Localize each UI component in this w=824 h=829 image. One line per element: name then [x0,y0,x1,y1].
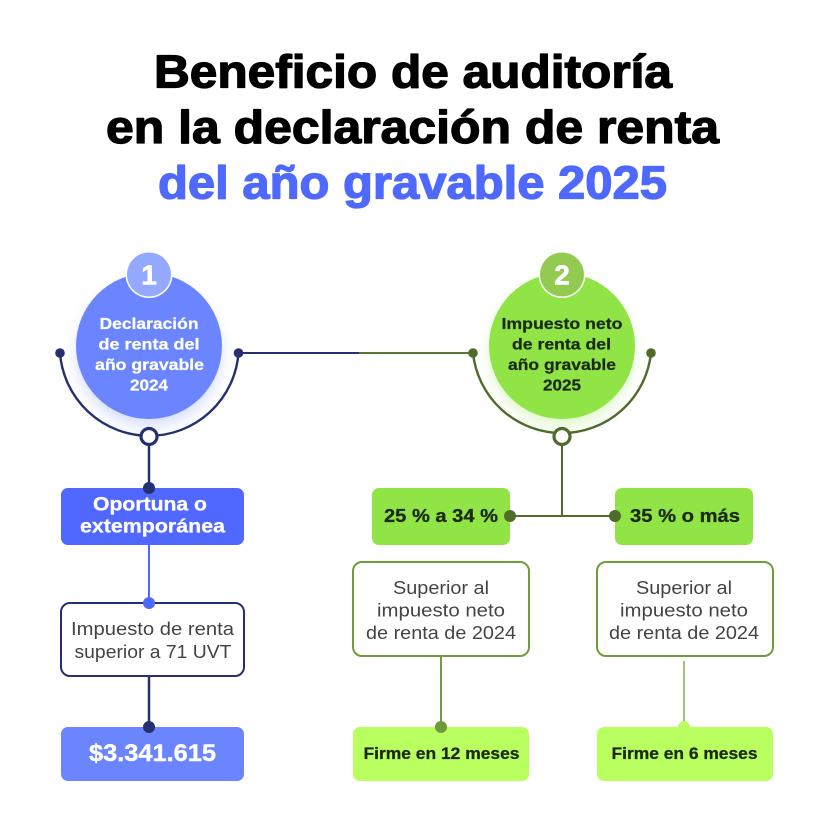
panel: step 2 header: Impuesto neto [502,316,623,333]
box: impuesto superior a 71 UVT: superior a 71 UVT [74,642,232,662]
title [106,46,720,208]
box: firme en 12 meses: Firme en 12 meses [364,745,520,763]
panel: step 2 header: de renta del [512,336,611,354]
box: impuesto superior a 71 UVT: Impuesto de renta [71,619,235,639]
connector between the two headers [238,352,473,354]
box: superior al impuesto (6 meses): impuesto neto [620,600,748,620]
panel: right column flow [353,445,773,781]
box: 25 % a 34 %: 25 % a 34 % [384,505,498,526]
box: 35 % o más [615,488,753,545]
box: 25 % a 34 % [372,488,510,545]
title: del año gravable 2025 [158,156,667,208]
box: superior al impuesto (6 meses): Superior al [636,578,732,598]
box: superior al impuesto (12 meses): impuesto neto [377,600,505,620]
box: firme en 6 meses: Firme en 6 meses [612,745,758,763]
panel: step 1 header: 1 [141,260,157,290]
box: oportuna o extemporánea: extemporánea [80,516,225,538]
title: Beneficio de auditoría [154,46,673,98]
title: en la declaración de renta [106,101,720,153]
box: oportuna o extemporánea: Oportuna o [93,494,207,516]
panel: step 1 header: de renta del [98,336,200,354]
box: superior al impuesto (12 meses): de renta de 2024 [366,623,516,643]
panel: step 2 header [468,251,656,444]
box: superior al impuesto (6 meses) [597,562,773,656]
box: superior al impuesto (6 meses): de renta de 2024 [609,623,759,643]
box: superior al impuesto (12 meses) [353,562,529,656]
panel: step 2 header: año gravable [508,357,616,374]
box: 35 % o más: 35 % o más [630,505,740,526]
panel: step 1 header: Declaración [100,316,198,333]
panel: step 1 header: año gravable [95,357,204,374]
panel: left column flow [61,445,244,781]
box: impuesto superior a 71 UVT [61,603,244,676]
panel: step 1 header [55,251,243,444]
box: firme en 6 meses [597,727,773,781]
box: amount: $3.341.615 [89,740,216,767]
box: amount [61,727,244,781]
box: firme en 12 meses [353,727,529,781]
panel: step 2 header: 2025 [543,378,581,394]
panel: step 2 header: 2 [554,260,570,290]
panel: step 1 header: 2024 [130,378,168,394]
box: oportuna o extemporánea [61,488,244,545]
box: superior al impuesto (12 meses): Superior al [393,578,489,598]
